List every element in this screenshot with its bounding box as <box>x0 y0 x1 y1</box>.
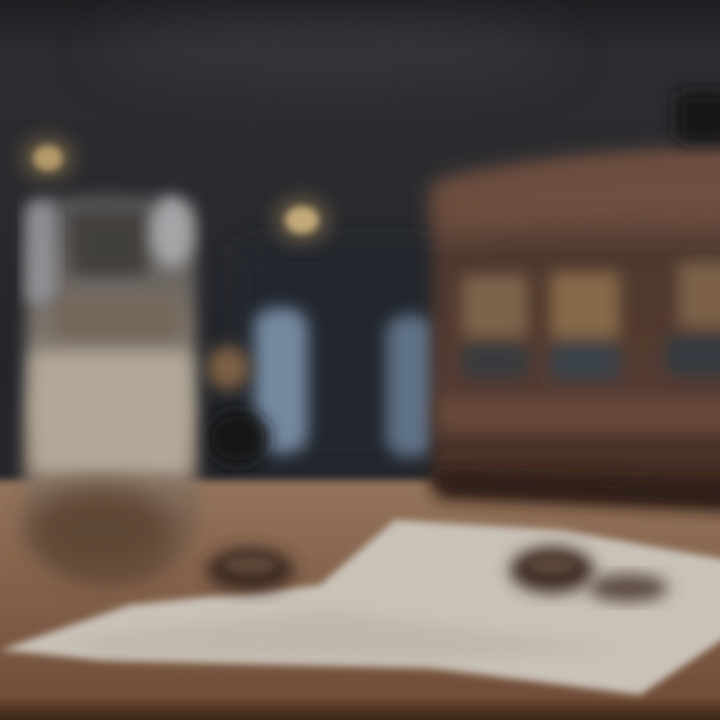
ceiling light left <box>20 134 76 182</box>
coin shadow right <box>588 574 668 602</box>
paper shading <box>60 610 620 660</box>
wall highlight <box>100 14 560 86</box>
cabinet compartment right <box>666 262 720 376</box>
cabinet compartment middle <box>550 272 620 380</box>
cabinet compartment left <box>462 275 528 378</box>
coin left <box>206 548 294 592</box>
wooden cabinet <box>432 150 720 512</box>
dark object at window base <box>206 410 270 466</box>
jar left highlight <box>26 200 56 305</box>
small amber glow <box>206 346 250 390</box>
cabinet base <box>432 472 720 512</box>
jar lid shadow <box>70 210 148 276</box>
paper sheets <box>0 520 720 695</box>
jar contents <box>28 488 172 572</box>
jar body <box>22 195 198 585</box>
background wall <box>0 0 720 520</box>
cabinet top rail <box>438 155 720 235</box>
dark window frame <box>240 245 440 470</box>
cabinet lower rail <box>438 398 720 432</box>
table <box>0 480 720 720</box>
coin right <box>510 547 594 593</box>
ceiling light right <box>272 194 332 246</box>
blue window left <box>254 308 308 453</box>
dark object on cabinet <box>676 92 720 142</box>
table bottom edge <box>0 708 720 720</box>
jar mid band <box>55 298 180 340</box>
glass jar <box>22 195 198 585</box>
blue window right <box>386 315 436 457</box>
jar pale label <box>32 352 190 474</box>
jar right highlight <box>150 196 194 268</box>
